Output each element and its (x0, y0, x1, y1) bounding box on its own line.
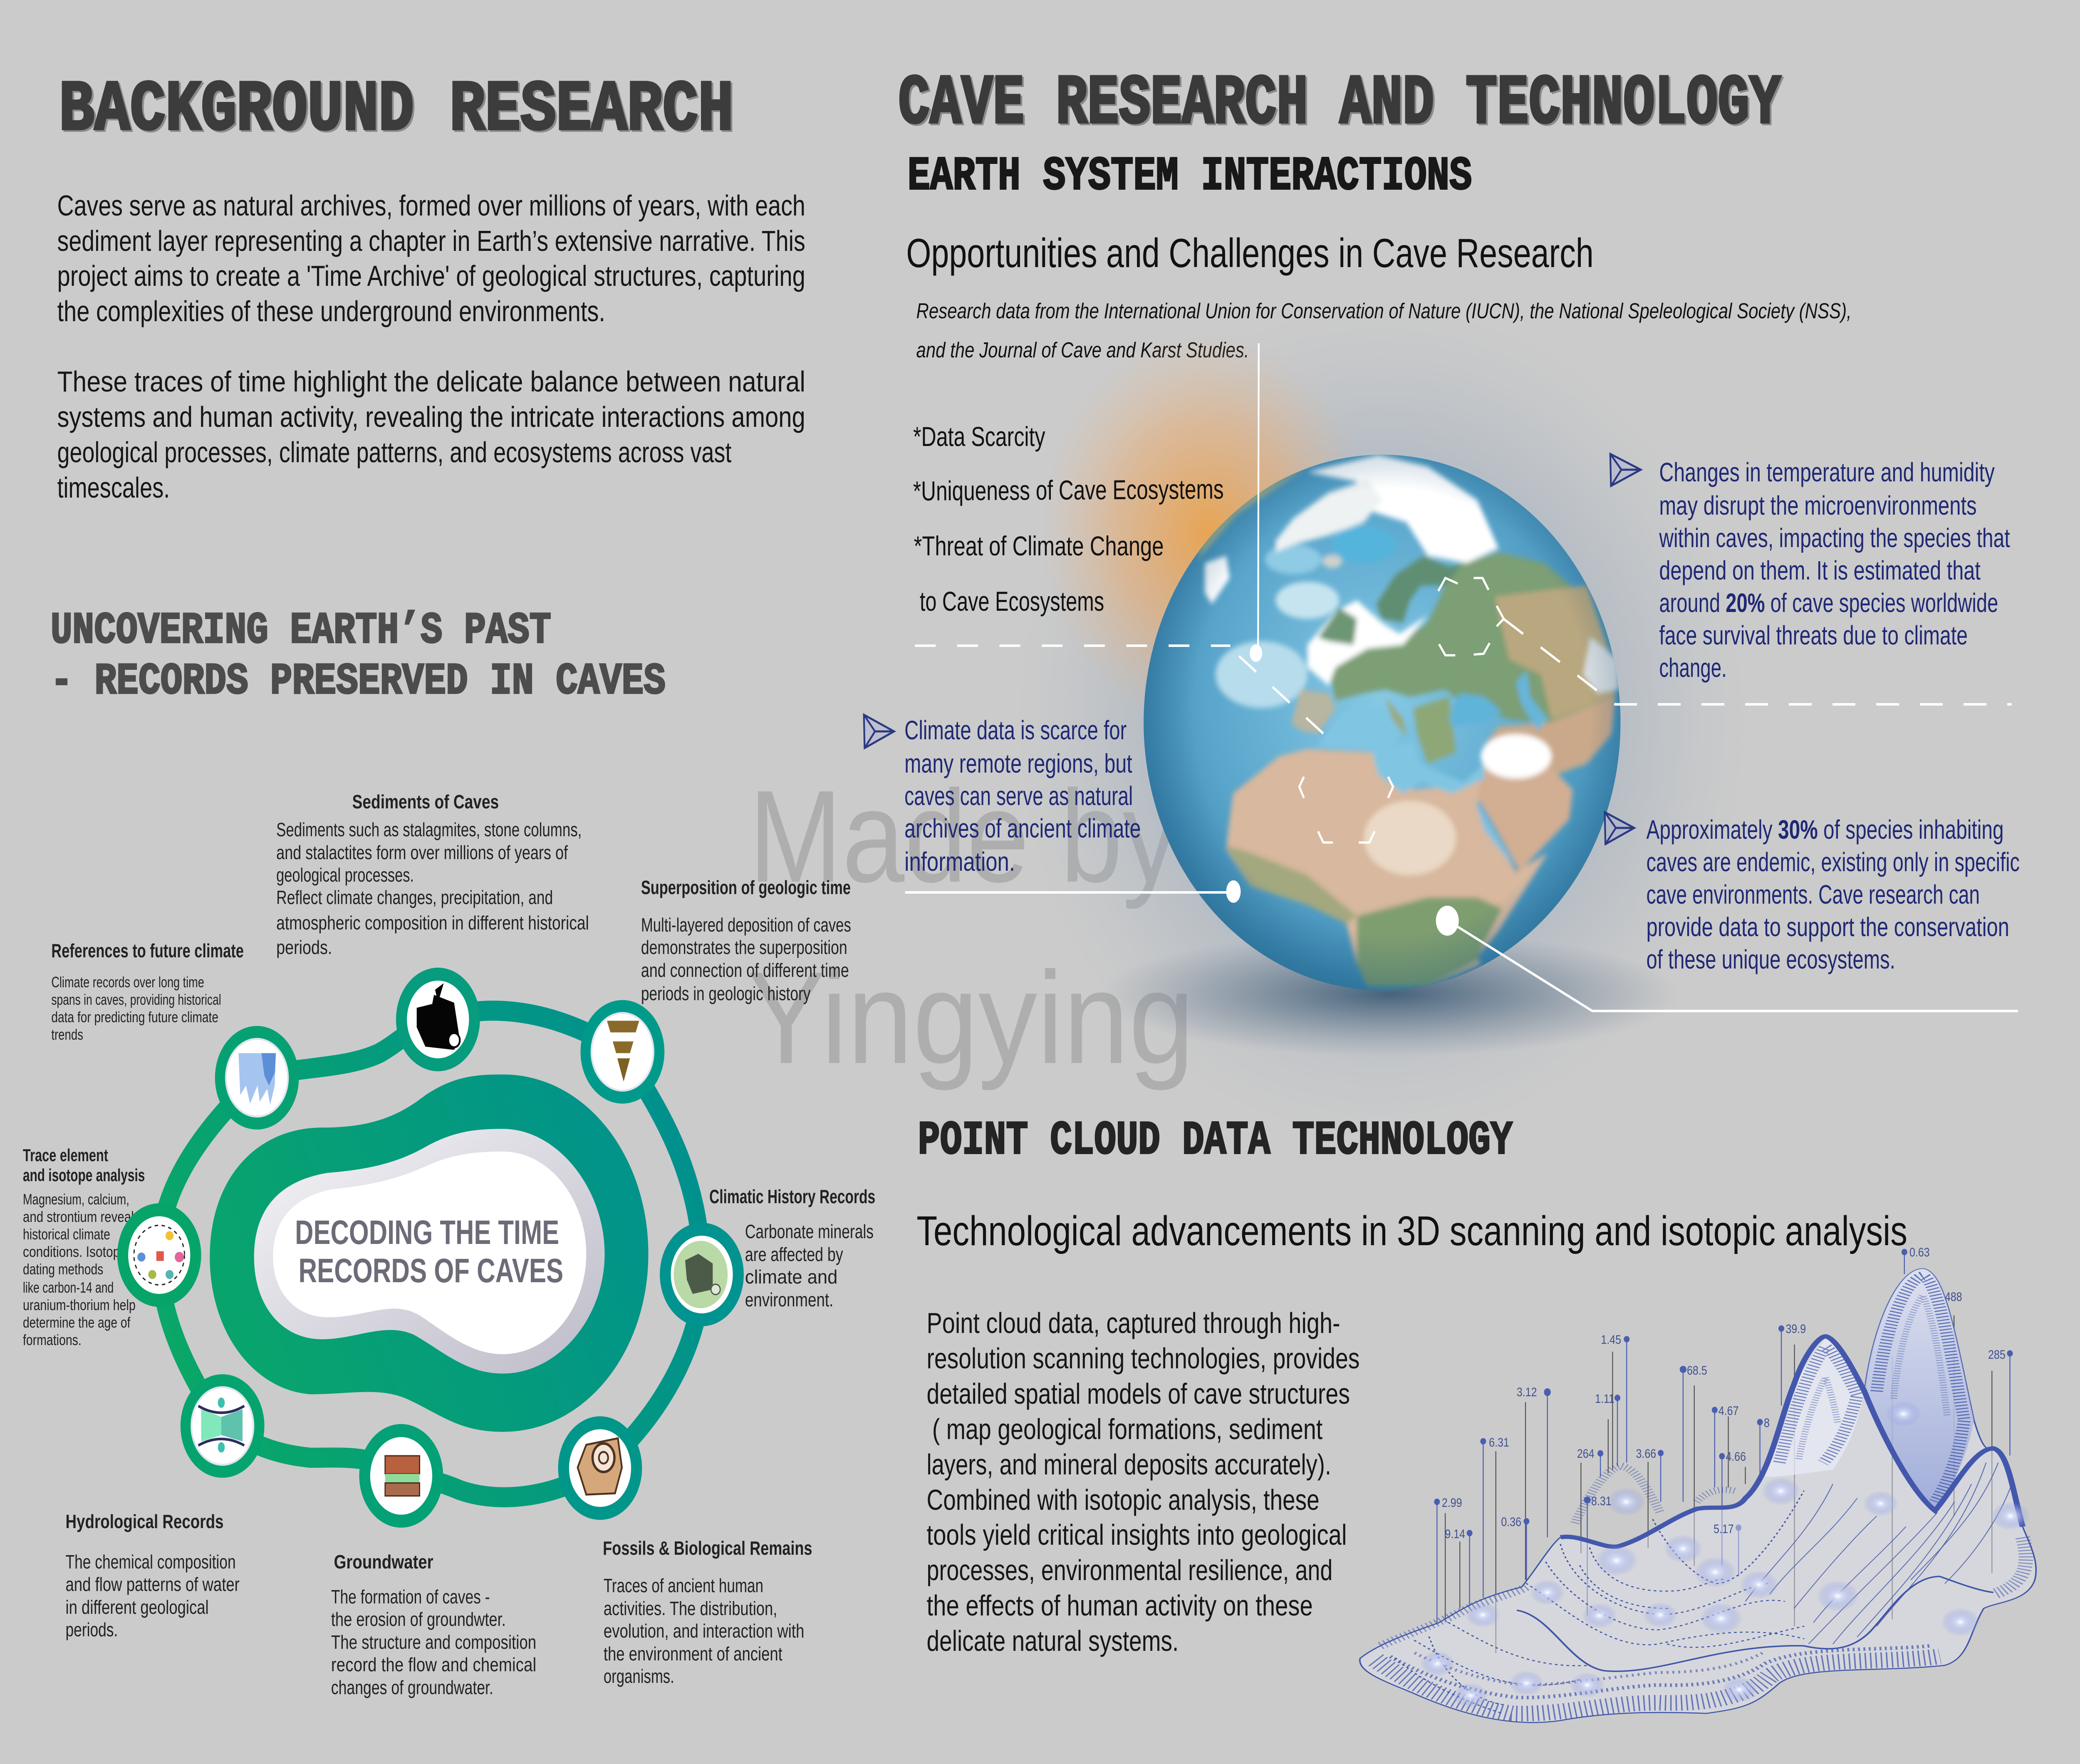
text: sediments of caves: Sediments such as stalagmites, stone columns, (276, 819, 582, 840)
text: research data sources: Research data from the International Union for Conservation of Nature (IUCN), the National Speleological Society (NSS), (916, 299, 1852, 323)
watermark: Made by (749, 763, 1179, 910)
text block: background research body: geological processes, climate patterns, and ecosystems across vast (57, 436, 731, 468)
central blob face (273, 1152, 586, 1354)
diagram title: RECORDS OF CAVES (299, 1251, 563, 1289)
callout: endemic species: of these unique ecosystems. (1647, 945, 1895, 974)
text: point cloud body: resolution scanning technologies, provides (927, 1342, 1359, 1375)
chart value labels: 0.63 (1909, 1245, 1930, 1259)
text: hydrological records: and flow patterns of water (66, 1574, 240, 1595)
surface ridge (1560, 1336, 2023, 1547)
globe glow (1014, 302, 1748, 1142)
text: trace element and isotope analysis (23, 1146, 145, 1349)
chart value labels: 1.45 (1601, 1333, 1621, 1347)
central blob bevel (254, 1129, 605, 1374)
text: trace element and isotope analysis: and strontium reveal (23, 1209, 134, 1226)
chart value labels: 68.5 (1687, 1363, 1707, 1378)
text: groundwater: changes of groundwater. (331, 1677, 493, 1698)
text: references to future climate (51, 940, 244, 1043)
text: references to future climate: Climate records over long time (51, 974, 204, 991)
text: superposition of geologic time: demonstrates the superposition (641, 937, 847, 958)
text: point cloud body: the effects of human activity on these (927, 1589, 1313, 1622)
list: challenges: *Threat of Climate Change (914, 530, 1164, 561)
node: superposition (580, 1000, 664, 1104)
text: trace element and isotope analysis: and isotope analysis (23, 1166, 145, 1185)
node: sediments of caves (396, 968, 480, 1071)
heading: uncovering earth's past: UNCOVERING EARTH’S PAST (51, 606, 551, 656)
chart value labels: 9.14 (1445, 1527, 1465, 1541)
text: groundwater: the erosion of groundwter. (331, 1609, 506, 1630)
chart value labels: 285 (1988, 1348, 2006, 1362)
text: hydrological records: in different geological (66, 1597, 209, 1618)
icon: arrow right callout bottom (1605, 812, 1634, 844)
surface body (1360, 1269, 2036, 1722)
surface tall peak (1865, 1269, 1974, 1511)
list: challenges: *Data Scarcity (913, 421, 1045, 452)
text: groundwater: The structure and composition (331, 1632, 536, 1653)
text: references to future climate: trends (51, 1026, 83, 1043)
text: climatic history records: climate and (745, 1266, 837, 1288)
text: fossils and biological remains: organisms. (604, 1666, 674, 1687)
heading: uncovering earth's past (51, 606, 666, 707)
chart value labels: 1.11 (1595, 1392, 1614, 1406)
ring path (159, 1011, 702, 1497)
watermark: Yingying (747, 945, 1194, 1092)
text: trace element and isotope analysis: historical climate (23, 1226, 110, 1243)
text: climatic history records: Climatic History Records (709, 1186, 875, 1207)
watermark (747, 763, 1194, 1092)
text: trace element and isotope analysis: determine the age of (23, 1314, 131, 1331)
chart: point cloud surface (1360, 1249, 2036, 1722)
text: sediments of caves: Sediments of Caves (352, 791, 499, 813)
list: challenges: *Uniqueness of Cave Ecosystems (913, 474, 1224, 506)
text: fossils and biological remains: Traces of ancient human (604, 1575, 763, 1596)
text: groundwater: Groundwater (334, 1551, 433, 1573)
heading: point cloud data technology: POINT CLOUD DATA TECHNOLOGY (918, 1115, 1513, 1168)
globe (1144, 455, 1620, 990)
leader: right dashed (1504, 619, 2012, 704)
leader: right solid (1436, 906, 2018, 1011)
text block: background research body (57, 189, 805, 504)
text: fossils and biological remains: evolution, and interaction with (604, 1620, 804, 1642)
heading: earth system interactions: EARTH SYSTEM INTERACTIONS (908, 150, 1472, 203)
text: trace element and isotope analysis: dating methods (23, 1261, 103, 1278)
text: trace element and isotope analysis: Trace element (23, 1146, 108, 1165)
text: trace element and isotope analysis: uranium-thorium help (23, 1297, 136, 1314)
text: trace element and isotope analysis: like carbon-14 and (23, 1279, 114, 1296)
callout: temperature and humidity: within caves, impacting the species that (1659, 524, 2010, 553)
heading: uncovering earth's past: - RECORDS PRESERVED IN CAVES (51, 657, 666, 707)
chart value labels: 6.31 (1489, 1435, 1509, 1449)
diagram title: DECODING THE TIME (295, 1213, 559, 1251)
node: fossils (558, 1416, 642, 1520)
text: superposition of geologic time: Multi-layered deposition of caves (641, 914, 851, 936)
text: groundwater (331, 1551, 536, 1698)
heading: technological advancements: Technological advancements in 3D scanning and isotopic analysis (916, 1208, 1907, 1254)
text block: background research body: project aims to create a 'Time Archive' of geological structures, capturing (57, 260, 805, 292)
callout: climate data: many remote regions, but (904, 749, 1132, 778)
text: superposition of geologic time (641, 877, 851, 1004)
text: superposition of geologic time: Superposition of geologic time (641, 877, 851, 898)
callout: temperature and humidity: depend on them. It is estimated that (1659, 556, 1981, 585)
node: references to future climate (215, 1026, 299, 1130)
text block: background research body: These traces of time highlight the delicate balance between natural (57, 365, 805, 398)
text: references to future climate: spans in caves, providing historical (51, 991, 221, 1008)
surface glow points (1420, 1401, 2030, 1708)
callout: temperature and humidity: may disrupt the microenvironments (1659, 491, 1977, 520)
text: trace element and isotope analysis: formations. (23, 1332, 82, 1349)
text: climatic history records: Carbonate minerals (745, 1221, 874, 1242)
callout: temperature and humidity (1659, 458, 2010, 683)
text: fossils and biological remains: activities. The distribution, (604, 1598, 777, 1619)
callout: temperature and humidity: Changes in temperature and humidity (1659, 458, 1995, 487)
callout: climate data: archives of ancient climate (904, 814, 1141, 843)
icon: arrow right callout top (1610, 454, 1641, 486)
text: fossils and biological remains: the environment of ancient (604, 1643, 782, 1665)
chart value labels: 5.17 (1714, 1522, 1734, 1536)
text: sediments of caves: atmospheric composition in different historical (276, 912, 589, 934)
surface thin contours (1746, 1463, 2011, 1644)
callout: temperature and humidity: around 20% of cave species worldwide (1659, 589, 1998, 618)
globe hex brackets (1299, 578, 1504, 842)
surface hatching (1376, 1276, 2026, 1714)
chart value labels: 3.66 (1636, 1447, 1656, 1461)
text block: background research body: timescales. (57, 471, 170, 504)
diagram title (295, 1213, 563, 1289)
text block: background research body: sediment layer representing a chapter in Earth’s extensive narrative. This (57, 225, 805, 257)
chart value labels: 39.9 (1785, 1322, 1806, 1336)
node: trace element (117, 1203, 201, 1307)
chart value labels: 8 (1764, 1416, 1770, 1430)
callout: climate data: information. (904, 847, 1015, 877)
text: point cloud body: detailed spatial models of cave structures (927, 1378, 1350, 1410)
text: hydrological records: periods. (66, 1619, 118, 1640)
text: superposition of geologic time: and connection of different time (641, 960, 849, 981)
text block: background research body: the complexities of these underground environments. (57, 295, 605, 327)
text: point cloud body: ( map geological formations, sediment (932, 1413, 1322, 1445)
text: point cloud body: delicate natural systems. (927, 1625, 1179, 1657)
text: groundwater: record the flow and chemical (331, 1654, 536, 1675)
text: point cloud body: processes, environmental resilience, and (927, 1554, 1332, 1586)
text: groundwater: The formation of caves - (331, 1586, 490, 1608)
callout: endemic species (1647, 815, 2020, 974)
text: point cloud body: Point cloud data, captured through high- (927, 1307, 1340, 1339)
chart value labels: 4.66 (1726, 1449, 1746, 1464)
node: climatic history (660, 1223, 744, 1326)
node: groundwater (359, 1424, 443, 1528)
text: hydrological records: The chemical composition (66, 1551, 236, 1573)
text: fossils and biological remains: Fossils & Biological Remains (603, 1538, 812, 1559)
chart value labels: 4.67 (1718, 1404, 1738, 1418)
heading: background research: BACKGROUND RESEARCH (59, 70, 733, 151)
node: hydrological (181, 1374, 265, 1478)
leader: left dashed diagonal (1239, 656, 1323, 733)
text: sediments of caves: geological processes. (276, 865, 414, 886)
diagram: decoding ring (117, 968, 744, 1528)
callout: climate data (904, 716, 1141, 877)
text: trace element and isotope analysis: conditions. Isotope (23, 1244, 127, 1261)
text: superposition of geologic time: periods in geologic history (641, 983, 811, 1004)
text: climatic history records: environment. (745, 1289, 833, 1311)
leader: white vertical line (1250, 343, 1262, 662)
surface dotted contours (1395, 1491, 1804, 1713)
text: climatic history records: are affected by (745, 1244, 843, 1265)
text: point cloud body: Combined with isotopic analysis, these (927, 1484, 1320, 1516)
text: hydrological records (66, 1511, 240, 1640)
callout: endemic species: caves are endemic, existing only in specific (1647, 848, 2020, 877)
text: point cloud body: layers, and mineral deposits accurately). (927, 1448, 1331, 1481)
surface front fold (1517, 1576, 1993, 1671)
leader: left dashed horizontal (915, 644, 1231, 647)
chart value labels: 2.99 (1442, 1496, 1462, 1510)
callout: endemic species: Approximately 30% of species inhabiting (1647, 815, 2004, 845)
chart value stems (1434, 1249, 2013, 1653)
chart value labels: 488 (1945, 1290, 1962, 1304)
globe shading (1144, 455, 1620, 990)
callout: temperature and humidity: change. (1659, 654, 1727, 683)
chart value labels: 3.12 (1517, 1385, 1537, 1399)
text: sediments of caves: and stalactites form over millions of years of (276, 842, 568, 863)
chart value labels: 8.31 (1591, 1494, 1612, 1508)
text: references to future climate: data for predicting future climate (51, 1009, 218, 1026)
text: fossils and biological remains (603, 1538, 812, 1687)
central blob (210, 1075, 649, 1432)
text: sediments of caves (276, 791, 589, 958)
heading: cave research and technology: CAVE RESEARCH AND TECHNOLOGY (898, 64, 1781, 144)
icon: arrow left callout (864, 715, 894, 748)
chart value labels: 264 (1577, 1447, 1595, 1461)
text: point cloud body (927, 1307, 1359, 1657)
callout: endemic species: provide data to support the conservation (1647, 913, 2009, 942)
text: sediments of caves: periods. (276, 937, 332, 958)
callout: temperature and humidity: face survival threats due to climate (1659, 621, 1968, 650)
text: trace element and isotope analysis: Magnesium, calcium, (23, 1191, 129, 1208)
text block: background research body: Caves serve as natural archives, formed over millions of years, with each (57, 189, 805, 222)
leader: left solid (905, 880, 1241, 903)
chart value labels: 0.36 (1501, 1515, 1521, 1529)
chart value labels (1442, 1245, 2006, 1541)
list: challenges: to Cave Ecosystems (920, 586, 1104, 617)
text: point cloud body: tools yield critical insights into geological (927, 1519, 1347, 1551)
surface second peak (1765, 1338, 1865, 1477)
callout: climate data: caves can serve as natural (904, 782, 1133, 811)
text: sediments of caves: Reflect climate changes, precipitation, and (276, 887, 553, 908)
globe ocean (1144, 455, 1620, 990)
heading: opportunities and challenges: Opportunities and Challenges in Cave Research (906, 230, 1594, 276)
text block: background research body: systems and human activity, revealing the intricate interactions among (57, 401, 805, 433)
text: research data sources (916, 299, 1852, 362)
globe land (1198, 455, 1619, 986)
text: references to future climate: References to future climate (51, 940, 244, 961)
text: hydrological records: Hydrological Records (66, 1511, 224, 1532)
list: challenges (913, 421, 1224, 617)
text: climatic history records (709, 1186, 875, 1311)
callout: climate data: Climate data is scarce for (904, 716, 1127, 745)
text: research data sources: and the Journal of Cave and Karst Studies. (916, 338, 1249, 362)
callout: endemic species: cave environments. Cave research can (1647, 880, 1980, 909)
